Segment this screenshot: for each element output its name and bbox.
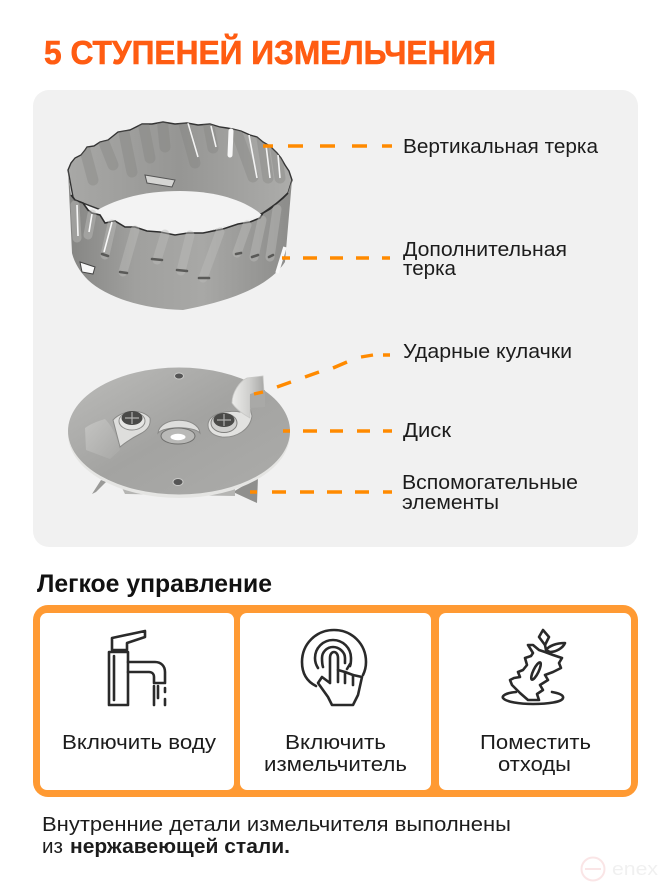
label: additional grater: терка — [403, 257, 457, 280]
footnote text: Внутренние детали измельчителя выполнены — [42, 813, 511, 836]
label: turn on grinder: Включить — [285, 731, 386, 754]
footnote text: из — [42, 835, 63, 858]
label: auxiliary elements: Вспомогательные — [402, 471, 578, 494]
watermark logo — [582, 858, 658, 880]
label: auxiliary elements — [402, 471, 578, 514]
label: turn on grinder — [264, 731, 407, 776]
footnote text — [42, 813, 511, 858]
heading: easy control: Легкое управление — [37, 570, 272, 598]
label: place waste: Поместить — [480, 731, 591, 754]
label: vertical grater: Вертикальная терка — [403, 135, 599, 158]
label: place waste — [480, 731, 591, 776]
leader: additional grater — [282, 256, 390, 260]
label: disc: Диск — [403, 419, 452, 442]
icon: touch — [302, 630, 366, 705]
leader: vertical grater — [263, 144, 392, 148]
disc photo illustration — [68, 368, 290, 503]
leader: disc — [283, 429, 392, 433]
leader: impact lugs — [254, 355, 390, 394]
leader: auxiliary elements — [250, 490, 392, 494]
icon: faucet — [109, 631, 165, 705]
card: turn on grinder — [240, 613, 431, 790]
card: place waste — [439, 613, 631, 790]
label: turn on water: Включить воду — [62, 731, 217, 754]
label: place waste: отходы — [498, 753, 571, 776]
label: additional grater — [403, 238, 567, 280]
label: additional grater: Дополнительная — [403, 238, 567, 261]
label: turn on grinder: измельчитель — [264, 753, 407, 776]
title: 5 СТУПЕНЕЙ ИЗМЕЛЬЧЕНИЯ — [44, 33, 496, 71]
card: turn on water — [40, 613, 234, 790]
footnote text: нержавеющей стали. — [70, 835, 290, 858]
label: impact lugs: Ударные кулачки — [403, 340, 572, 363]
label: auxiliary elements: элементы — [402, 491, 499, 514]
grater ring photo illustration — [68, 118, 292, 310]
watermark logo: enex — [612, 859, 658, 879]
panel: parts diagram — [33, 90, 638, 547]
panel: control steps — [33, 605, 638, 797]
icon: apple core — [503, 630, 565, 704]
